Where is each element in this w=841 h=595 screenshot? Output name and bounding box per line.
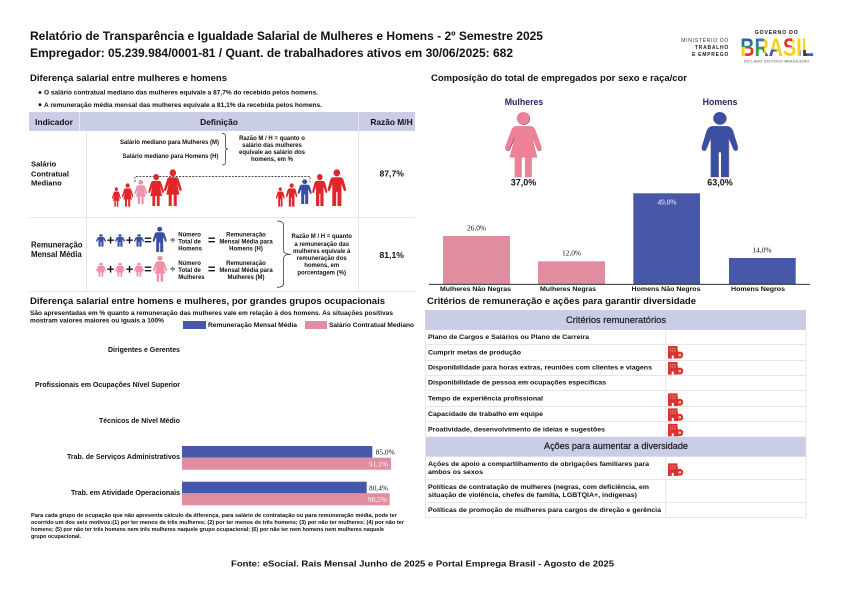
action rows: ambos os sexos	[428, 469, 483, 476]
row: remuneração mensal média: Total de	[178, 239, 202, 245]
operators	[107, 232, 216, 276]
bar chart: 49,0%	[657, 197, 677, 206]
row: remuneração mensal média: Total de	[178, 268, 202, 274]
bar chart: 91,1%	[369, 460, 388, 468]
row: remuneração mensal média: Remuneração	[226, 261, 266, 267]
logo: governo do brasil: DO LADO DO POVO BRASILEIRO	[744, 60, 810, 64]
icons: soma mulheres	[96, 256, 167, 282]
bar chart: 26,0%	[467, 223, 486, 232]
row: remuneração mensal média: Remuneração	[226, 232, 266, 238]
table bands: Ações para aumentar a diversidade	[544, 441, 688, 451]
operators: +	[126, 262, 134, 276]
row: remuneração mensal média: Mulheres (M)	[227, 275, 265, 281]
icons: soma homens	[96, 227, 167, 252]
action rows: Políticas de promoção de mulheres para cargos de direção e gerência	[428, 507, 661, 514]
criteria rows: Capacidade de trabalho em equipe	[428, 411, 543, 418]
criteria rows	[428, 334, 652, 433]
icon: mulheres: 37,0%	[511, 178, 536, 188]
operators: +	[126, 232, 134, 248]
title: Relatório de Transparência e Igualdade Salarial de Mulheres e Homens - 2º Semestre 2025	[30, 29, 543, 43]
row: remuneração mensal média: Razão M / H = quanto	[291, 234, 352, 240]
logo: ministério: MINISTÉRIO DO	[681, 37, 729, 44]
bar chart: 85,0%	[376, 448, 395, 456]
dashed comparison line	[135, 176, 310, 182]
row: remuneração mensal média: Número	[178, 232, 201, 238]
icon: mulheres	[505, 97, 543, 188]
logo: ministério	[681, 37, 729, 58]
bar chart: 12,0%	[562, 248, 581, 257]
row: remuneração mensal média: Remuneração	[31, 240, 83, 250]
bar chart: 90,5%	[368, 495, 387, 504]
title	[30, 29, 543, 60]
action rows	[428, 461, 661, 514]
operators: ÷	[170, 236, 175, 246]
logo: ministério: E EMPREGO	[692, 52, 729, 58]
footnote: Para cada grupo de ocupação que não apresenta cálculo da diferença, para salário de contratação ou para remuneração média, pode ter	[31, 513, 398, 519]
brace	[222, 134, 228, 165]
operators: +	[107, 262, 115, 276]
row: remuneração mensal média: 81,1%	[380, 250, 404, 260]
title: Empregador: 05.239.984/0001-81 / Quant. de trabalhadores ativos em 30/06/2025: 682	[30, 46, 513, 60]
table header	[29, 112, 415, 131]
icon: homens: Homens	[703, 97, 737, 107]
criteria rows: Tempo de experiência profissional	[428, 395, 543, 402]
table lines	[425, 330, 806, 518]
bar chart: Homens Negros	[731, 286, 785, 293]
source note: Fonte: eSocial. Rais Mensal Junho de 2025 e Portal Emprega Brasil - Agosto de 2025	[231, 558, 614, 568]
panel: critérios de remuneração e ações	[425, 296, 806, 518]
bar chart: Técnicos de Nível Médio	[99, 418, 180, 425]
row: salário contratual mediano: Mediano	[31, 178, 62, 188]
row: salário contratual mediano: 87,7%	[380, 169, 404, 179]
row: remuneração mensal média: Mensal Média para	[219, 239, 273, 245]
row: salário contratual mediano: Salário mediano para Homens (H)	[122, 154, 218, 160]
row: remuneração mensal média: Homens (H)	[229, 246, 263, 252]
bullet list	[39, 90, 322, 109]
criteria rows: Proatividade, desenvolvimento de ideias e sugestões	[428, 426, 605, 433]
criteria rows: Cumprir metas de produção	[428, 349, 521, 356]
criteria rows: Disponibilidade para horas extras, reuniões com clientes e viagens	[428, 364, 652, 371]
table lines	[29, 131, 415, 292]
table bands: Critérios remuneratórios	[566, 315, 667, 325]
row: remuneração mensal média: a remuneração das	[294, 242, 350, 248]
subtitle: mostram valores maiores ou iguais a 100%	[30, 318, 164, 324]
row: remuneração mensal média: porcentagem (%)	[297, 270, 346, 276]
footnote: ocorrido um dos seis motivos:(1) por ter menos de três mulheres; (2) por ter menos de três homens; (3) por não ter mulheres; (4) por não ter	[31, 520, 405, 526]
bar chart: Profissionais em Ocupações Nível Superior	[35, 382, 180, 389]
subtitle: São apresentadas em % quanto a remuneração das mulheres vale em relação à dos homens. As situações positivas	[30, 310, 393, 317]
criteria rows: Disponibilidade de pessoa em ocupações específicas	[428, 379, 606, 386]
row: remuneração mensal média: Mulheres	[178, 275, 205, 281]
operators: =	[144, 262, 152, 276]
bar chart: 14,0%	[752, 245, 772, 254]
heading: Diferença salarial entre homens e mulheres, por grandes grupos ocupacionais	[30, 296, 385, 307]
panel: diferença salarial por grupos ocupacionais	[30, 296, 414, 540]
bar chart: Trab. em Atividade Operacionais	[71, 490, 180, 497]
row: remuneração mensal média	[31, 221, 404, 287]
row: remuneração mensal média: Mensal Média para	[219, 268, 273, 274]
table header: Definição	[200, 117, 238, 127]
bar chart: Homens Não Negros	[632, 286, 701, 293]
icon: homens	[702, 97, 738, 188]
table header: Razão M/H	[370, 117, 413, 127]
row: salário contratual mediano: homens, em %	[251, 157, 294, 163]
icon: mulheres: Mulheres	[505, 97, 543, 107]
operators: =	[144, 232, 152, 248]
icon: homens: 63,0%	[707, 178, 733, 188]
row: salário contratual mediano: Contratual	[31, 170, 69, 178]
action rows: Ações de apoio a compartilhamento de obrigações familiares para	[428, 461, 649, 468]
row: remuneração mensal média: Número	[178, 261, 201, 267]
bar chart: Mulheres Não Negras	[440, 286, 511, 293]
operators: =	[208, 262, 216, 276]
operators: =	[208, 232, 216, 248]
legend	[183, 321, 414, 329]
bar chart: Mulheres Negras	[540, 286, 596, 293]
row: remuneração mensal média: remuneração dos	[297, 256, 347, 262]
logo: governo do brasil	[740, 30, 814, 64]
heading: Diferença salarial entre mulheres e homens	[30, 73, 227, 84]
panel: diferença salarial entre mulheres e homens	[29, 73, 415, 292]
action rows: Políticas de contratação de mulheres (negras, com deficiência, em	[428, 484, 649, 491]
footnote: homens; (5) por não ter três homens nem três mulheres naquele grupo ocupacional; (6) por não ter nem homens nem mulheres naquele	[31, 527, 384, 533]
bar chart: 80,4%	[369, 484, 388, 492]
table bands	[425, 310, 806, 457]
logo: ministério: TRABALHO	[695, 45, 729, 51]
row: remuneração mensal média: mulheres equivale à	[293, 249, 351, 255]
row: salário contratual mediano: Razão M / H = quanto o	[239, 136, 305, 142]
row: remuneração mensal média: Mensal Média	[31, 250, 82, 259]
heading: Composição do total de empregados por sexo e raça/cor	[431, 73, 687, 84]
bar chart: Dirigentes e Gerentes	[108, 347, 180, 354]
operators: +	[107, 232, 115, 248]
action rows: situação de violência, chefes de família, LGBTQIA+, indígenas)	[428, 492, 637, 499]
row: remuneração mensal média: homens, em	[304, 263, 339, 269]
legend: Salário Contratual Mediano	[329, 322, 414, 329]
operators: ÷	[170, 265, 175, 275]
icons: homens	[276, 169, 346, 207]
bar chart	[35, 347, 395, 505]
icons: empresa	[668, 346, 683, 476]
legend: Remuneração Mensal Média	[208, 322, 297, 329]
bar chart: Trab. de Serviços Administrativos	[67, 454, 180, 461]
footnote: grupo ocupacional.	[31, 534, 82, 540]
row: remuneração mensal média: Homens	[178, 246, 203, 252]
row: salário contratual mediano: Salário mediano para Mulheres (M)	[120, 140, 219, 146]
row: salário contratual mediano: Salário	[31, 160, 57, 168]
row: salário contratual mediano	[31, 134, 404, 207]
bar chart	[429, 193, 810, 293]
bullet list: A remuneração média mensal das mulheres equivale a 81,1% da recebida pelos homens.	[44, 102, 322, 109]
table header: Indicador	[35, 117, 74, 127]
panel: composição por sexo e raça/cor	[429, 73, 810, 293]
logo: governo do brasil: GOVERNO DO	[755, 30, 799, 36]
row: salário contratual mediano: salário das mulheres	[242, 143, 303, 149]
criteria rows: Plano de Cargos e Salários ou Plano de Carreira	[428, 334, 589, 341]
row: salário contratual mediano: equivale ao salário dos	[239, 150, 306, 156]
bullet list: O salário contratual mediano das mulheres equivale a 87,7% do recebido pelos homens.	[44, 90, 318, 97]
brace	[277, 221, 291, 287]
heading: Critérios de remuneração e ações para garantir diversidade	[427, 296, 696, 307]
icons: mulheres	[112, 169, 182, 207]
